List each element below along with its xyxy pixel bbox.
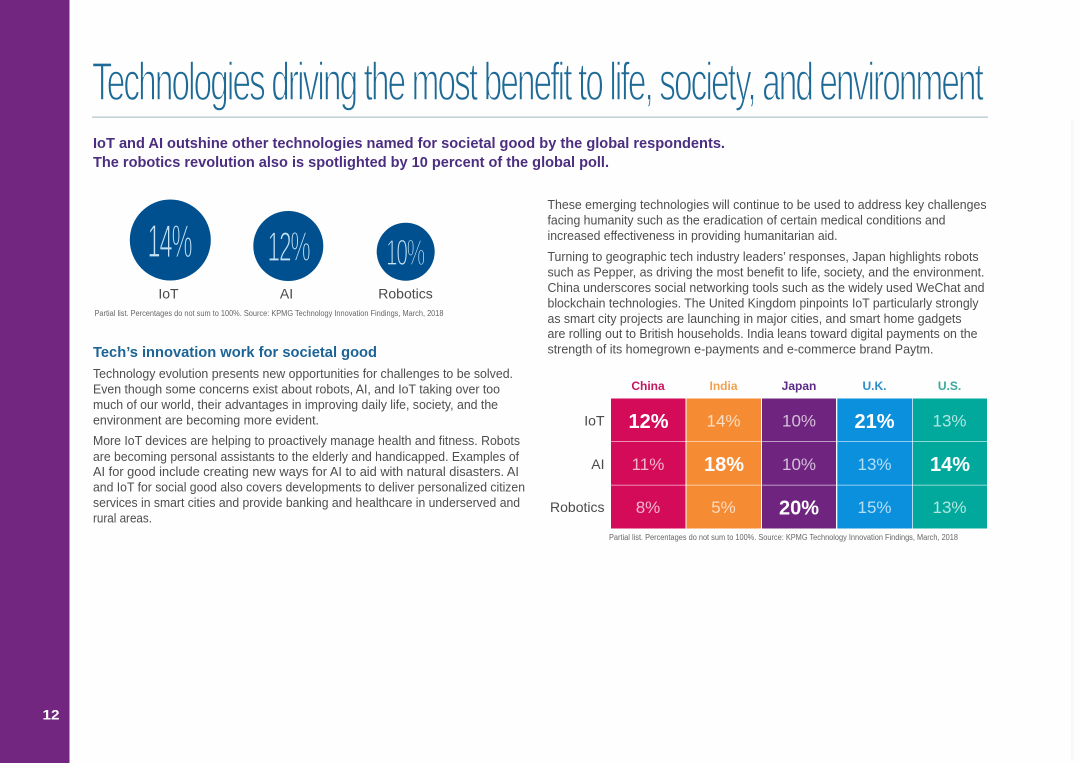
column: Japan: 20%	[779, 498, 819, 520]
left body text: much of our world, their advantages in improving daily life, society, and the	[93, 398, 498, 412]
right body text: These emerging technologies will continue to be used to address key challenges	[548, 198, 986, 212]
column: U.S.: 13%	[932, 412, 967, 430]
column: U.S.: 13%	[932, 498, 967, 517]
column: India: 14%	[706, 412, 741, 430]
bubble: Robotics 10%: 10%	[386, 232, 425, 273]
column: U.K.	[837, 398, 912, 528]
row labels: AI	[591, 456, 604, 472]
column: Japan	[762, 398, 836, 528]
bubble: AI 12%: AI	[280, 286, 293, 302]
left body text: More IoT devices are helping to proactively manage health and fitness. Robots	[93, 434, 520, 448]
column: India: 18%	[704, 454, 744, 476]
column: Japan: 10%	[782, 455, 816, 474]
page number: 12	[42, 706, 60, 722]
right body text: blockchain technologies. The United Kingdom pinpoints IoT particularly strongly	[548, 296, 979, 310]
left body text	[93, 367, 525, 526]
right body text: Turning to geographic tech industry leaders’ responses, Japan highlights robots	[548, 250, 978, 264]
column: China: 8%	[636, 498, 660, 517]
column: U.S.: 14%	[930, 454, 970, 476]
footnote: bubbles: Partial list. Percentages do not sum to 100%. Source: KPMG Technology Innovation Findings, March, 2018	[94, 309, 444, 318]
column: India	[686, 398, 761, 528]
bubble: IoT 14%: IoT	[158, 286, 179, 302]
bubble: AI 12%: 12%	[268, 223, 310, 270]
country headers: China	[631, 379, 665, 393]
column: U.K.: 15%	[857, 498, 892, 517]
subheading: The robotics revolution also is spotlighted by 10 percent of the global poll.	[93, 155, 609, 171]
bubble: Robotics 10%: Robotics	[378, 286, 433, 302]
row labels	[550, 412, 605, 515]
country headers: U.S.	[938, 379, 961, 393]
column: China: 12%	[628, 411, 669, 433]
country headers: India	[709, 379, 738, 393]
column: U.K.: 13%	[857, 455, 892, 474]
section heading: Tech’s innovation work for societal good	[93, 345, 377, 361]
right body text	[548, 198, 986, 356]
country headers	[631, 379, 961, 393]
left body text: AI for good include creating new ways for AI to aid with natural disasters. AI	[93, 465, 519, 479]
bubble: AI 12%	[253, 211, 323, 302]
left body text: and IoT for social good also covers developments to deliver personalized citizen	[93, 480, 525, 494]
column: U.K.: 21%	[854, 411, 895, 433]
left body text: rural areas.	[93, 512, 152, 526]
row labels: Robotics	[550, 499, 604, 515]
column: China	[611, 398, 686, 528]
bubble: IoT 14%	[130, 200, 211, 302]
left body text: Technology evolution presents new opportunities for challenges to be solved.	[93, 367, 513, 381]
column: U.S.	[913, 398, 987, 528]
right body text: facing humanity such as the eradication of certain medical conditions and	[548, 214, 946, 228]
right body text: are rolling out to British households. India leans toward digital payments on the	[548, 327, 978, 341]
right body text: strength of its homegrown e-payments and e-commerce brand Paytm.	[548, 342, 934, 356]
bubble chart: global top technologies	[130, 200, 435, 302]
right body text: increased effectiveness in providing humanitarian aid.	[548, 229, 838, 243]
footnote: table: Partial list. Percentages do not sum to 100%. Source: KPMG Technology Innovation Findings, March, 2018	[609, 533, 959, 542]
left body text: Even though some concerns exist about robots, AI, and IoT taking over too	[93, 382, 500, 396]
left body text: are becoming personal assistants to the elderly and handicapped. Examples of	[93, 450, 519, 464]
heat table: technologies by country	[550, 379, 987, 528]
right body text: such as Pepper, as driving the most benefit to life, society, and the environment.	[548, 266, 984, 280]
country headers: U.K.	[862, 379, 886, 393]
row labels: IoT	[584, 412, 605, 428]
right body text: China underscores social networking tools such as the widely used WeChat and	[548, 281, 984, 295]
purple sidebar	[0, 0, 70, 763]
bubble: Robotics 10%	[377, 223, 435, 302]
right body text: as smart city projects are launching in major cities, and smart home gadgets	[548, 312, 962, 326]
subheading: IoT and AI outshine other technologies named for societal good by the global respondents.	[93, 136, 725, 152]
bubble: IoT 14%: 14%	[148, 215, 192, 267]
column: China: 11%	[632, 455, 664, 474]
subheading	[93, 136, 725, 171]
column: Japan: 10%	[782, 412, 816, 430]
left body text: services in smart cities and provide banking and healthcare in underserved and	[93, 496, 520, 510]
column: India: 5%	[711, 498, 736, 517]
left body text: environment are becoming more evident.	[93, 414, 319, 428]
country headers: Japan	[782, 379, 816, 393]
